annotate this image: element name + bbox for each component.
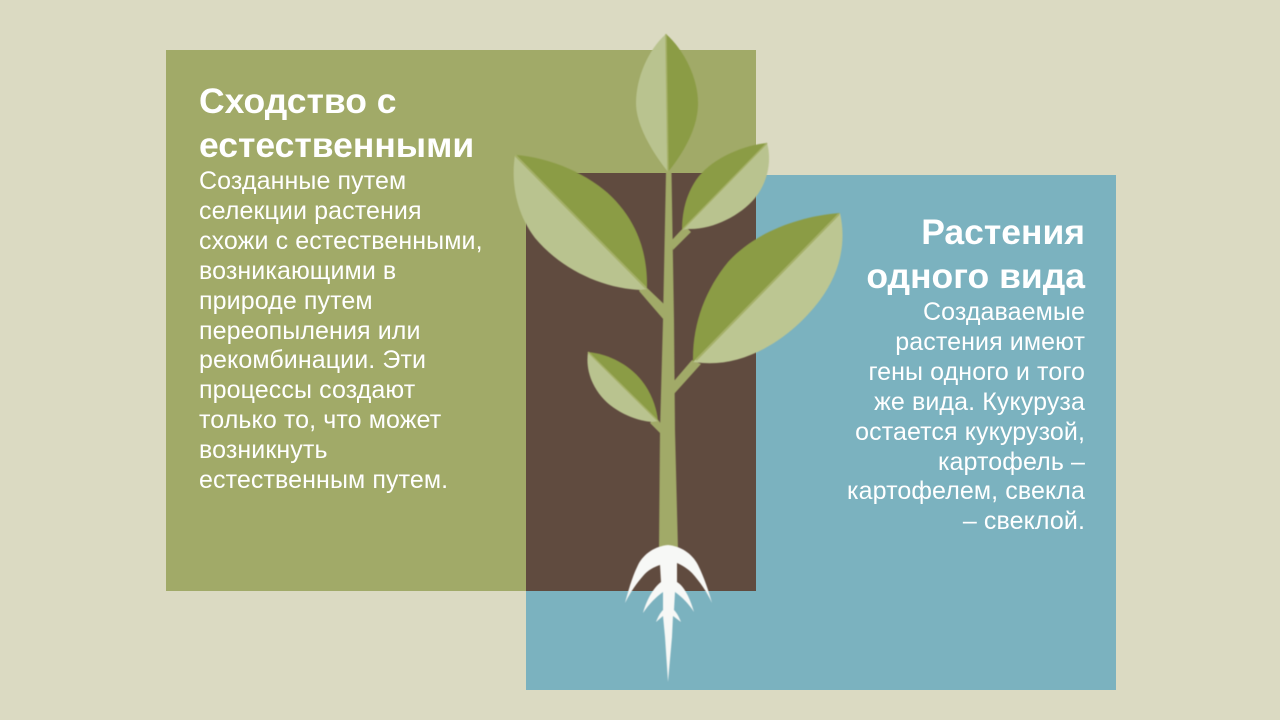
text block: left body: селекции растения bbox=[199, 197, 422, 225]
branch: lower right bbox=[674, 360, 701, 394]
roots bbox=[625, 545, 712, 682]
text block: left heading: естественными bbox=[199, 125, 474, 165]
text block: right body: же вида. Кукуруза bbox=[874, 388, 1085, 416]
text block: left body: рекомбинации. Эти bbox=[199, 346, 426, 374]
text block: left body: возникнуть bbox=[199, 436, 328, 464]
text block: right body: картофель – bbox=[938, 448, 1085, 476]
text block: left body: Созданные путем bbox=[199, 167, 406, 195]
text block: right body bbox=[847, 298, 1085, 535]
branch: upper right bbox=[671, 226, 691, 250]
leaf: top bbox=[636, 34, 698, 172]
branch: lower left bbox=[650, 417, 664, 435]
text block: left body: процессы создают bbox=[199, 376, 415, 404]
text block: left body: только то, что может bbox=[199, 406, 441, 434]
panel: brown soil bbox=[526, 173, 756, 591]
text block: right heading: одного вида bbox=[866, 256, 1085, 296]
text block: right body: гены одного и того bbox=[868, 358, 1085, 386]
text block: left body: природе путем bbox=[199, 287, 373, 315]
text block: left body bbox=[199, 167, 483, 494]
text block: left heading bbox=[199, 81, 474, 165]
text block: left heading: Сходство с bbox=[199, 81, 397, 121]
leaf: small left bbox=[587, 352, 658, 422]
leaf: large right bbox=[693, 213, 843, 363]
leaf: large left bbox=[514, 155, 647, 290]
text block: left body: переопыления или bbox=[199, 317, 421, 345]
stem bbox=[639, 172, 701, 550]
text block: left body: схожи с естественными, bbox=[199, 227, 483, 255]
text block: right body: остается кукурузой, bbox=[855, 418, 1085, 446]
text block: right heading bbox=[866, 212, 1086, 296]
panel: blue background bbox=[526, 175, 1116, 690]
text block: right heading: Растения bbox=[921, 212, 1085, 252]
branch: upper left bbox=[639, 285, 666, 320]
text block: left body: возникающими в bbox=[199, 257, 396, 285]
leaf: upper right bbox=[682, 143, 769, 230]
text block: left body: естественным путем. bbox=[199, 466, 448, 494]
text block: right body: картофелем, свекла bbox=[847, 477, 1085, 505]
text block: right body: растения имеют bbox=[895, 328, 1085, 356]
text block: right body: – свеклой. bbox=[963, 507, 1085, 535]
panel: green background bbox=[166, 50, 756, 591]
text block: right body: Создаваемые bbox=[923, 298, 1085, 326]
